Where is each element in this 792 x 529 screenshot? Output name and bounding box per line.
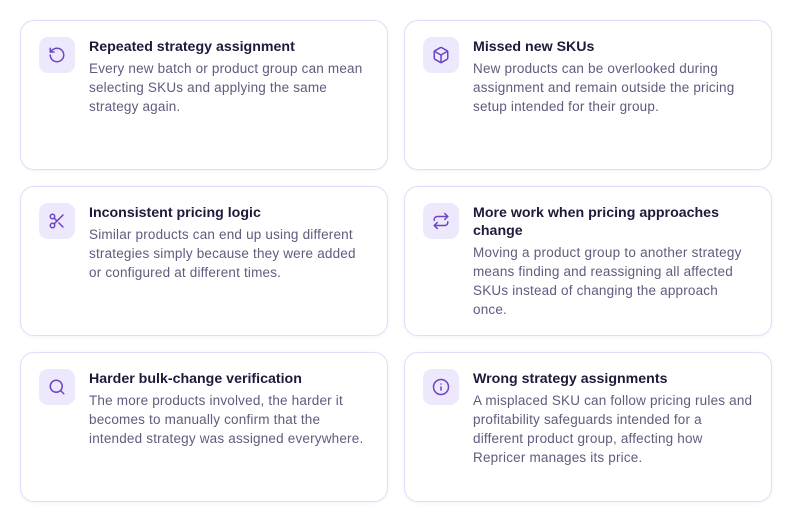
heading: Inconsistent pricing logic	[89, 205, 261, 221]
icon: magnifier	[39, 369, 75, 405]
text block: selecting SKUs and applying the same	[89, 80, 327, 95]
text block	[89, 393, 363, 446]
text block: or configured at different times.	[89, 265, 281, 280]
heading: Wrong strategy assignments	[473, 371, 667, 387]
icon: info	[423, 369, 459, 405]
text block	[473, 245, 742, 317]
heading: Harder bulk-change verification	[89, 371, 302, 387]
text block: The more products involved, the harder it	[89, 393, 343, 408]
text block: once.	[473, 302, 507, 317]
text block	[473, 61, 734, 114]
text block: strategies simply because they were added	[89, 246, 356, 261]
text block: A misplaced SKU can follow pricing rules and	[473, 393, 752, 408]
panel: missed new SKUs	[404, 20, 772, 170]
text block	[89, 61, 362, 114]
panel: inconsistent pricing logic	[20, 186, 388, 336]
heading: More work when pricing approaches	[473, 205, 719, 221]
icon: box	[423, 37, 459, 73]
heading: Missed new SKUs	[473, 39, 594, 55]
text block	[473, 393, 752, 465]
icon: repeat arrows	[423, 203, 459, 239]
icon: scissors	[39, 203, 75, 239]
icon: undo arrow	[39, 37, 75, 73]
text block	[89, 227, 356, 280]
text block: Similar products can end up using different	[89, 227, 353, 242]
text block: profitability safeguards intended for a	[473, 412, 702, 427]
panel: harder bulk-change verification	[20, 352, 388, 502]
heading	[473, 205, 719, 239]
text block: New products can be overlooked during	[473, 61, 718, 76]
text block: assignment and remain outside the pricing	[473, 80, 734, 95]
text block: Every new batch or product group can mean	[89, 61, 362, 76]
text block: Repricer manages its price.	[473, 450, 642, 465]
text block: intended strategy was assigned everywhere.	[89, 431, 363, 446]
text block: strategy again.	[89, 99, 180, 114]
text block: Moving a product group to another strategy	[473, 245, 742, 260]
text block: SKUs instead of changing the approach	[473, 283, 718, 298]
panel: repeated strategy assignment	[20, 20, 388, 170]
heading: Repeated strategy assignment	[89, 39, 295, 55]
heading: change	[473, 223, 523, 239]
text block: different product group, affecting how	[473, 431, 703, 446]
text block: becomes to manually confirm that the	[89, 412, 320, 427]
text block: means finding and reassigning all affected	[473, 264, 733, 279]
panel: more work when pricing approaches change	[404, 186, 772, 336]
panel: wrong strategy assignments	[404, 352, 772, 502]
text block: setup intended for their group.	[473, 99, 659, 114]
